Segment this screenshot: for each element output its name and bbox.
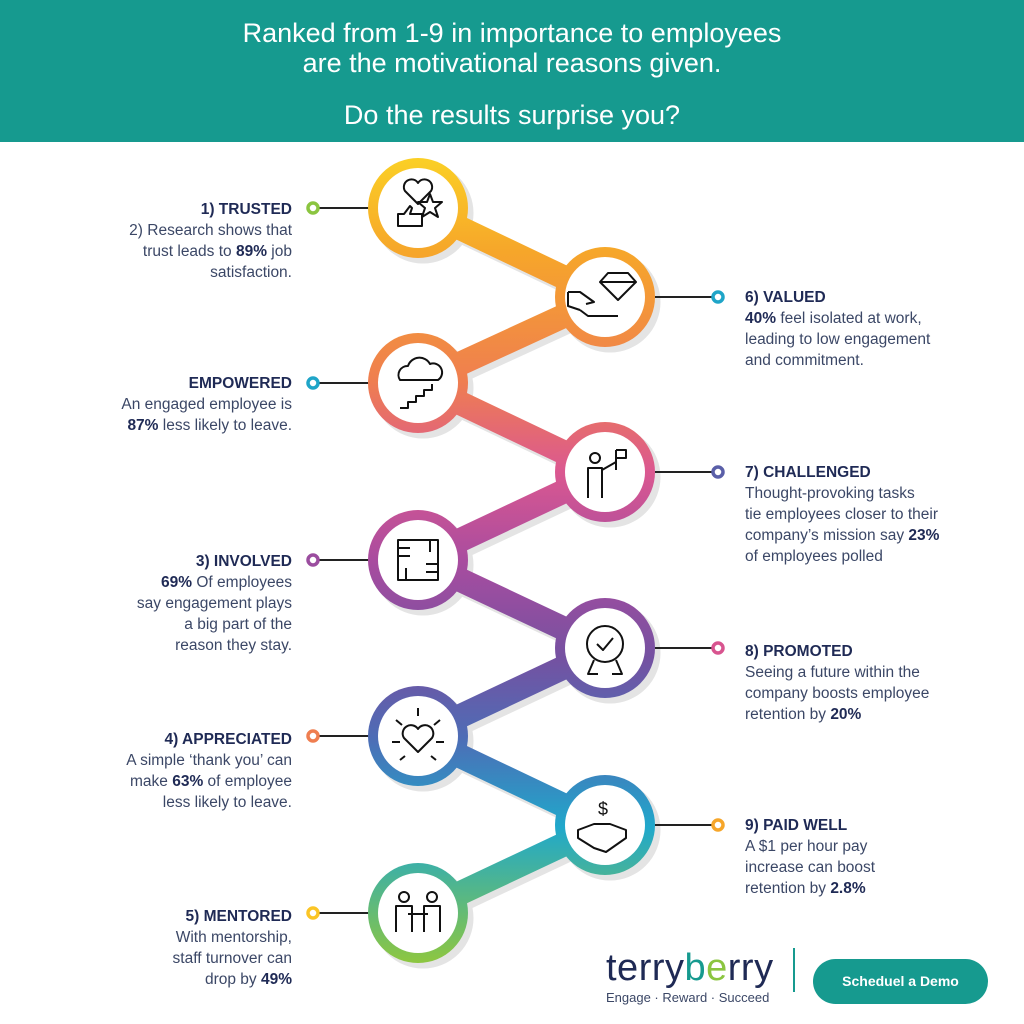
text: mentored: With mentorship, — [176, 929, 292, 946]
icons — [392, 179, 636, 932]
text: mentored: drop by 49% — [205, 971, 292, 988]
text: trusted — [129, 201, 292, 281]
text: challenged — [745, 464, 939, 565]
text: involved: reason they stay. — [175, 637, 292, 654]
button: schedule demo: Scheduel a Demo — [842, 973, 959, 989]
text: trusted: 1) TRUSTED — [201, 201, 292, 218]
text: challenged: company’s mission say 23% — [745, 527, 939, 544]
text: challenged: of employees polled — [745, 548, 883, 565]
text: mentored — [173, 908, 292, 988]
text: promoted: retention by 20% — [745, 706, 861, 723]
text: paid well: A $1 per hour pay — [745, 838, 867, 855]
text: appreciated: make 63% of employee — [130, 773, 292, 790]
icon: heart rays — [392, 708, 444, 760]
text: trusted: 2) Research shows that — [129, 222, 292, 239]
header banner: Ranked from 1-9 in importance to employees — [243, 18, 781, 48]
header banner: Do the results surprise you? — [344, 100, 680, 130]
text: promoted: Seeing a future within the — [745, 664, 920, 681]
text: empowered: 87% less likely to leave. — [127, 417, 292, 434]
text: challenged: Thought-provoking tasks — [745, 485, 915, 502]
text: valued: and commitment. — [745, 352, 864, 369]
text: paid well — [745, 817, 875, 897]
icon: handshake — [578, 799, 626, 852]
text: paid well: increase can boost — [745, 859, 875, 876]
gradient chain — [368, 158, 655, 963]
text: valued: 6) VALUED — [745, 289, 826, 306]
text: promoted — [745, 643, 929, 723]
text: involved: 69% Of employees — [161, 574, 292, 591]
text: trusted: satisfaction. — [210, 264, 292, 281]
text: appreciated — [126, 731, 292, 811]
text: empowered — [121, 375, 292, 434]
text: paid well: 9) PAID WELL — [745, 817, 847, 834]
connector lines — [318, 208, 713, 913]
icon: mentor people — [396, 892, 440, 932]
icon: hands — [398, 540, 438, 580]
button: schedule demo — [813, 959, 988, 1004]
text: appreciated: less likely to leave. — [163, 794, 292, 811]
icon: heart star thumbs — [398, 179, 442, 226]
text: challenged: 7) CHALLENGED — [745, 464, 871, 481]
text: empowered: EMPOWERED — [189, 375, 292, 392]
icon: cloud stairs — [398, 358, 442, 408]
shadow — [373, 163, 660, 968]
text: appreciated: 4) APPRECIATED — [165, 731, 292, 748]
text: valued: 40% feel isolated at work, — [745, 310, 922, 327]
icon: person flag — [588, 450, 626, 498]
text: valued — [745, 289, 930, 369]
text: mentored: 5) MENTORED — [185, 908, 292, 925]
text: involved: a big part of the — [184, 616, 292, 633]
text: challenged: tie employees closer to their — [745, 506, 938, 523]
text: promoted: 8) PROMOTED — [745, 643, 853, 660]
logo: terryberry — [606, 947, 774, 989]
text: involved: say engagement plays — [137, 595, 292, 612]
dots — [308, 203, 723, 918]
text: trusted: trust leads to 89% job — [143, 243, 292, 260]
logo: Engage · Reward · Succeed — [606, 990, 769, 1005]
icon: handshake: $ — [598, 799, 608, 819]
icon: badge — [587, 626, 623, 674]
icon: diamond hand — [568, 273, 636, 316]
text: involved: 3) INVOLVED — [196, 553, 292, 570]
text: empowered: An engaged employee is — [121, 396, 292, 413]
header banner — [0, 0, 1024, 142]
text: promoted: company boosts employee — [745, 685, 929, 702]
text: paid well: retention by 2.8% — [745, 880, 866, 897]
text: mentored: staff turnover can — [173, 950, 292, 967]
text: valued: leading to low engagement — [745, 331, 930, 348]
header banner: are the motivational reasons given. — [303, 48, 721, 78]
text: involved — [137, 553, 292, 654]
text: appreciated: A simple ‘thank you’ can — [126, 752, 292, 769]
